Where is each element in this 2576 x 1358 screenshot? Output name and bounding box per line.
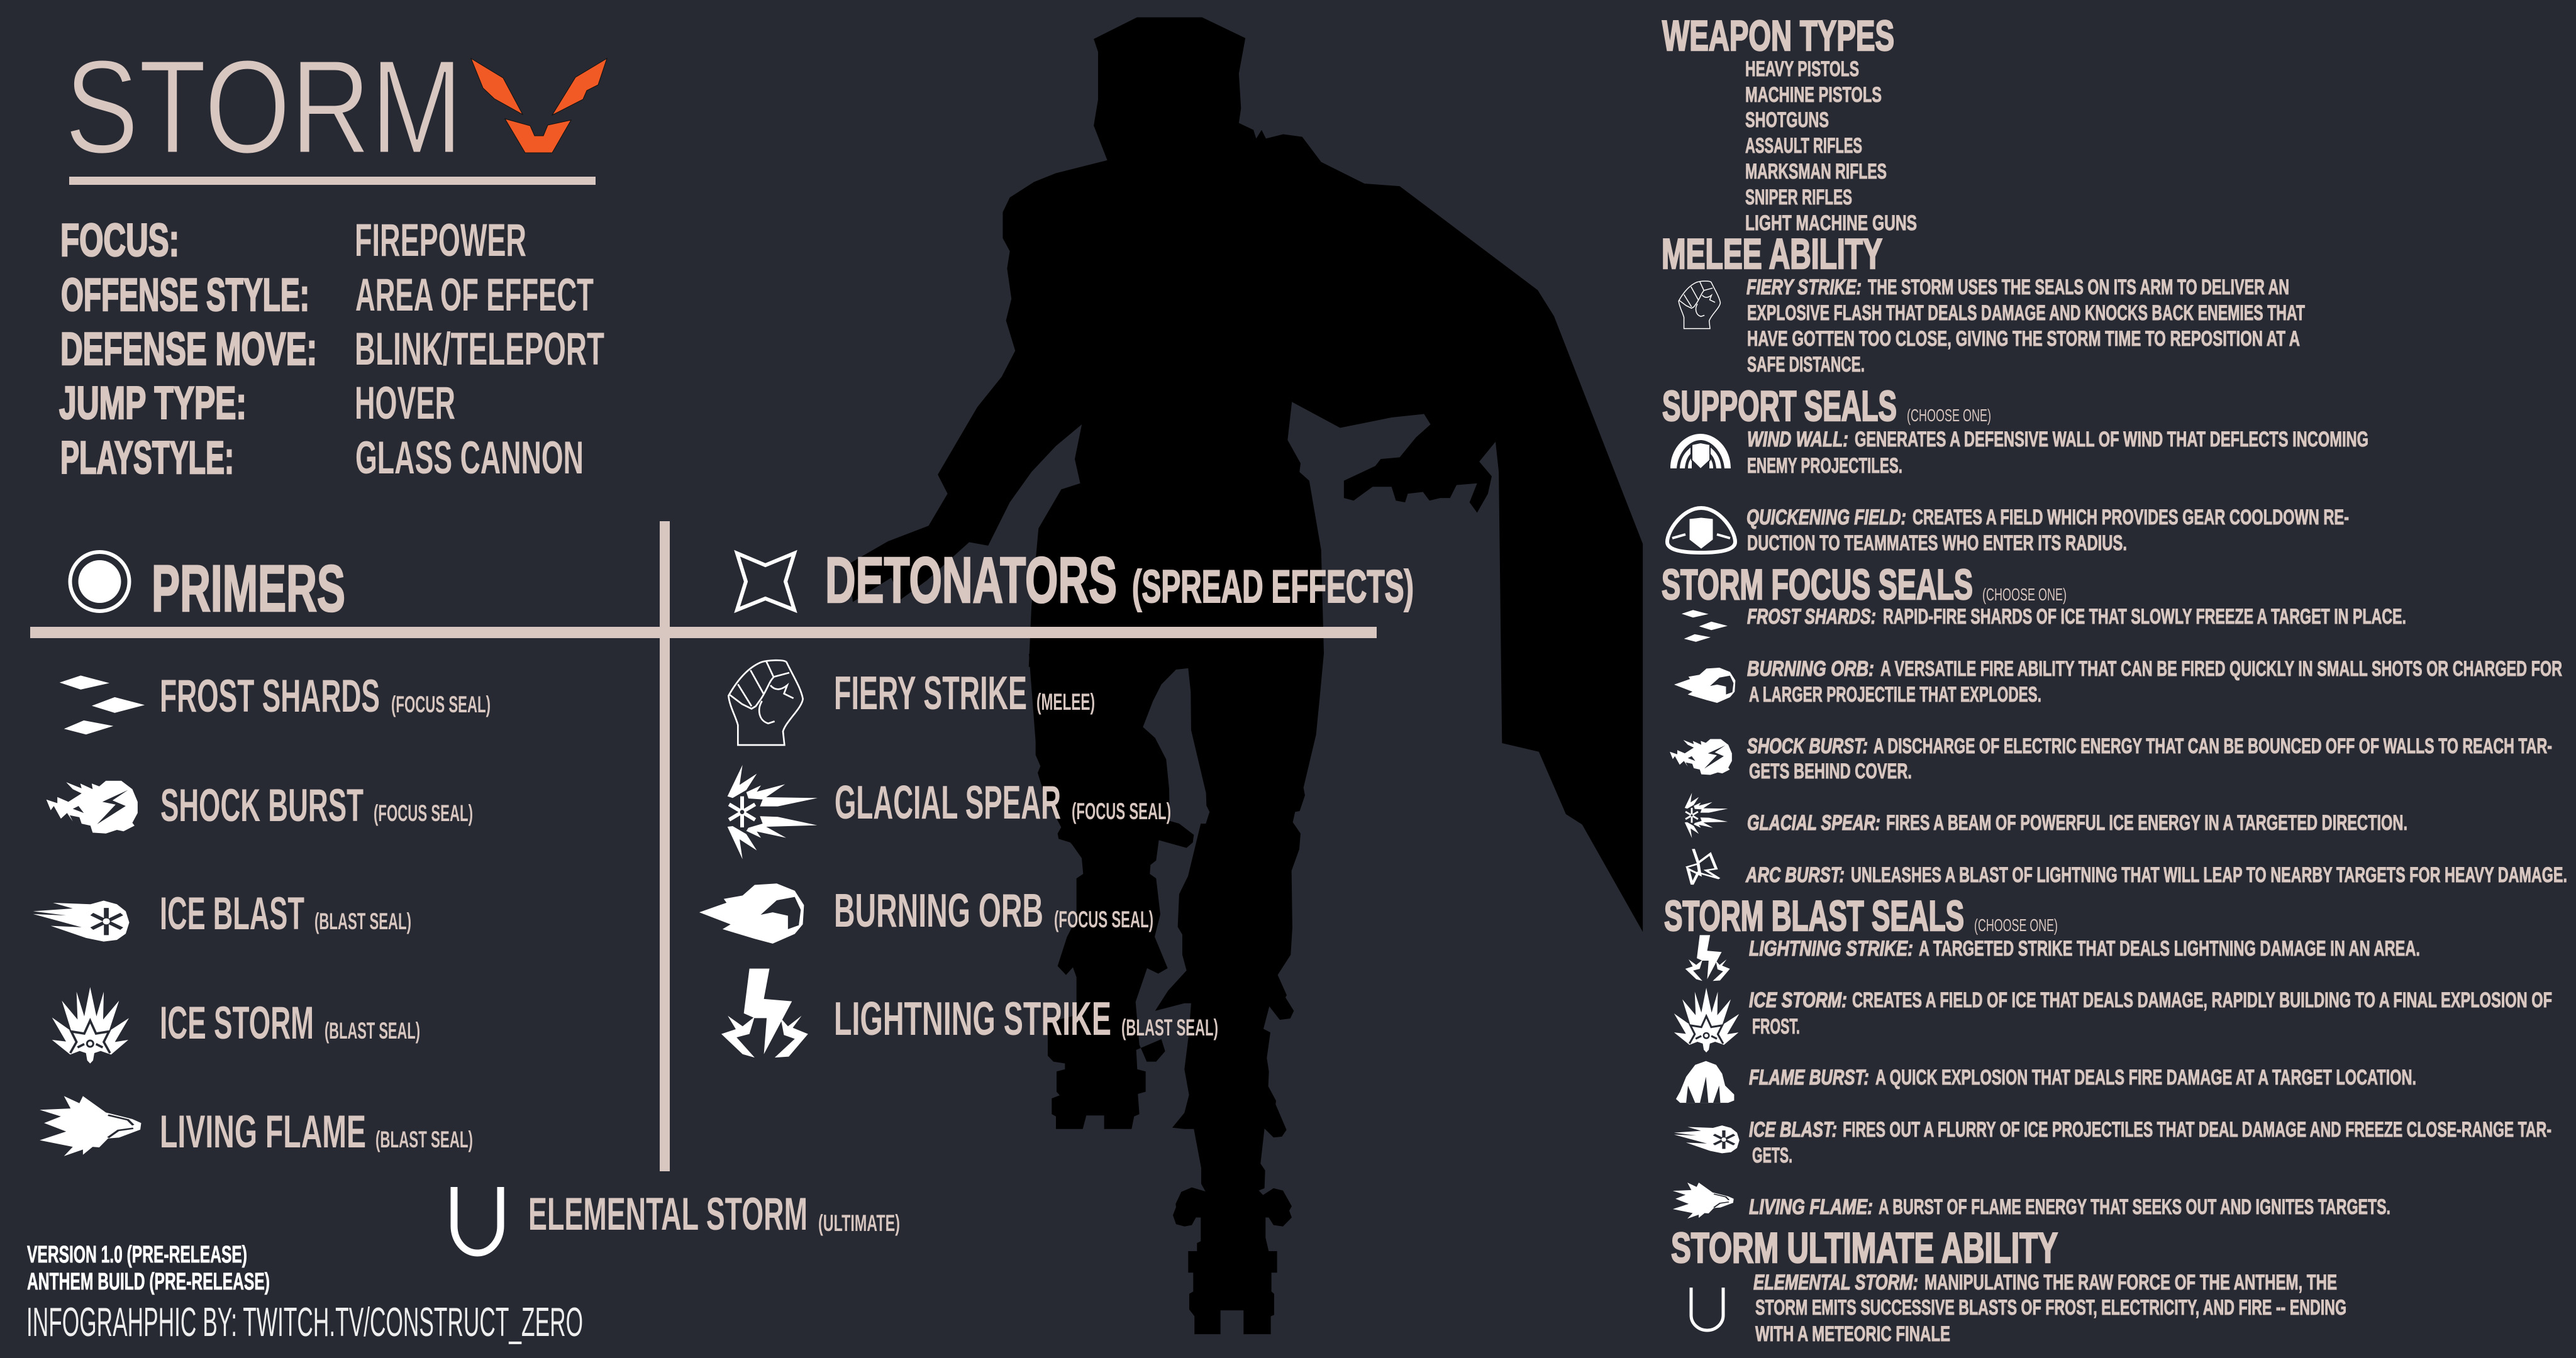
icon: fiery strike	[728, 660, 803, 745]
panel: class stats	[59, 215, 604, 483]
primer: living flame: (BLAST SEAL)	[375, 1127, 473, 1152]
panel: storm ultimate ability	[1671, 1224, 2346, 1346]
icon: shock burst small	[1670, 739, 1732, 775]
stat: jump type	[59, 378, 455, 429]
description: wind wall	[1747, 428, 2368, 478]
list: weapons: MARKSMAN RIFLES	[1745, 160, 1887, 184]
list: weapons: ASSAULT RIFLES	[1745, 134, 1862, 158]
description: ice blast: ICE BLAST:	[1749, 1118, 1837, 1142]
primer: ice storm: (BLAST SEAL)	[325, 1018, 420, 1044]
description: lightning strike: LIGHTNING STRIKE:	[1749, 937, 1913, 961]
description: fiery strike: FIERY STRIKE:	[1746, 275, 1862, 299]
stat: playstyle	[60, 433, 584, 483]
title block	[65, 32, 607, 185]
panel: detonators	[699, 544, 1414, 1057]
heading: detonators: DETONATORS	[825, 544, 1117, 616]
list: weapons: HEAVY PISTOLS	[1745, 57, 1859, 81]
icon: ice storm	[52, 987, 129, 1064]
stat: offense style: AREA OF EFFECT	[355, 270, 594, 321]
heading: storm ultimate ability: STORM ULTIMATE ABILITY	[1671, 1224, 2058, 1272]
icon: ice storm small	[1674, 988, 1739, 1052]
description: shock burst: SHOCK BURST:	[1747, 734, 1868, 758]
stat: defense move: BLINK/TELEPORT	[355, 324, 604, 375]
primer: shock burst: SHOCK BURST	[160, 780, 364, 831]
description: glacial spear: GLACIAL SPEAR:	[1747, 811, 1880, 835]
icon: lightning strike small	[1685, 935, 1730, 981]
description: elemental storm: WITH A METEORIC FINALE	[1755, 1322, 1950, 1346]
stat: playstyle: GLASS CANNON	[355, 433, 584, 483]
description: ice blast: GETS.	[1752, 1144, 1792, 1168]
description: quickening field: CREATES A FIELD WHICH PROVIDES GEAR COOLDOWN RE-	[1913, 505, 2349, 529]
author credit: INFOGRAHPHIC BY: TWITCH.TV/CONSTRUCT_ZERO	[26, 1299, 583, 1345]
description: burning orb: A LARGER PROJECTILE THAT EXPLODES.	[1749, 683, 2041, 707]
stat: defense move: DEFENSE MOVE:	[60, 324, 317, 375]
icon: burning orb	[699, 883, 804, 944]
heading: storm focus seals: STORM FOCUS SEALS	[1662, 561, 1973, 609]
heading: support seals: SUPPORT SEALS	[1662, 382, 1897, 430]
panel: melee ability	[1662, 230, 2305, 377]
stat: jump type: JUMP TYPE:	[59, 378, 247, 429]
description: quickening field: DUCTION TO TEAMMATES WHO ENTER ITS RADIUS.	[1747, 531, 2127, 555]
description: elemental storm: ELEMENTAL STORM:	[1753, 1271, 1918, 1295]
icon: detonator	[737, 553, 794, 610]
icon: shock burst	[47, 781, 138, 834]
panel: storm blast seals	[1664, 892, 2552, 1219]
heading: storm blast seals: STORM BLAST SEALS	[1664, 892, 1964, 940]
silhouette of storm javelin	[849, 18, 1643, 1334]
title underline	[69, 177, 596, 185]
description: elemental storm	[1753, 1271, 2346, 1346]
description: quickening field	[1746, 505, 2349, 555]
icon: glacial spear	[728, 765, 818, 859]
icon: burning orb small	[1674, 668, 1735, 703]
title: STORM: STORM	[65, 32, 463, 181]
description: frost shards: FROST SHARDS:	[1747, 605, 1876, 629]
list: weapons: SNIPER RIFLES	[1745, 185, 1852, 209]
primer: living flame: LIVING FLAME	[160, 1107, 366, 1157]
heading: melee ability: MELEE ABILITY	[1662, 230, 1882, 278]
primer: ice blast: (BLAST SEAL)	[314, 908, 411, 934]
icon: frost shards small	[1682, 610, 1728, 642]
table divider lines	[30, 521, 1377, 1171]
stat: offense style: OFFENSE STYLE:	[61, 270, 309, 321]
description: fiery strike	[1746, 275, 2305, 377]
icon: ultimate small	[1691, 1288, 1723, 1330]
description: lightning strike	[1749, 937, 2420, 961]
detonator: glacial spear: GLACIAL SPEAR	[835, 776, 1061, 829]
panel: weapon types	[1662, 12, 1917, 235]
primer: ice blast: ICE BLAST	[160, 888, 304, 939]
description: living flame	[1749, 1195, 2390, 1219]
detonator: glacial spear: (FOCUS SEAL)	[1072, 798, 1171, 824]
description: ice storm	[1749, 988, 2552, 1039]
icon: glacial spear small	[1685, 793, 1728, 838]
ultimate: elemental storm: (ULTIMATE)	[818, 1210, 900, 1236]
icon: quickening field	[1667, 508, 1735, 553]
list: weapons: LIGHT MACHINE GUNS	[1745, 211, 1917, 235]
icon: primer	[70, 552, 130, 611]
description: living flame: LIVING FLAME:	[1749, 1195, 1873, 1219]
version text: VERSION 1.0 (PRE-RELEASE)	[27, 1242, 247, 1268]
description: flame burst: FLAME BURST:	[1749, 1066, 1869, 1090]
description: wind wall: WIND WALL:	[1747, 428, 1848, 451]
heading: storm blast seals: (CHOOSE ONE)	[1974, 915, 2058, 935]
heading: storm focus seals: (CHOOSE ONE)	[1982, 585, 2067, 604]
icon: ultimate	[454, 1187, 501, 1253]
icon: flame burst	[1676, 1061, 1734, 1103]
icon: lightning strike	[721, 969, 808, 1057]
detonator: lightning strike: LIGHTNING STRIKE	[834, 992, 1111, 1045]
build text: ANTHEM BUILD (PRE-RELEASE)	[27, 1269, 270, 1295]
icon: fist	[1679, 281, 1720, 329]
stat: defense move	[60, 324, 604, 375]
description: ice blast	[1749, 1118, 2551, 1168]
primer: ice storm: ICE STORM	[160, 998, 314, 1049]
description: fiery strike: THE STORM USES THE SEALS ON ITS ARM TO DELIVER AN	[1868, 275, 2289, 299]
primer: frost shards: (FOCUS SEAL)	[391, 692, 491, 717]
description: glacial spear	[1747, 811, 2407, 835]
primer: frost shards: FROST SHARDS	[160, 671, 380, 722]
icon: storm logo	[471, 58, 607, 153]
list: weapons: SHOTGUNS	[1745, 108, 1829, 132]
icon: ice blast	[33, 900, 130, 942]
heading: primers: PRIMERS	[152, 552, 345, 626]
description: frost shards	[1747, 605, 2406, 629]
detonator: fiery strike: (MELEE)	[1036, 689, 1095, 715]
heading: weapon types: WEAPON TYPES	[1662, 12, 1894, 60]
icon: living flame small	[1673, 1183, 1734, 1218]
stat: focus	[60, 215, 526, 266]
description: shock burst: GETS BEHIND COVER.	[1749, 759, 1912, 783]
description: fiery strike: SAFE DISTANCE.	[1747, 353, 1865, 377]
panel: support seals	[1662, 382, 2368, 555]
subheading: spread effects: (SPREAD EFFECTS)	[1132, 561, 1414, 612]
detonator: burning orb: BURNING ORB	[834, 884, 1043, 937]
description: elemental storm: MANIPULATING THE RAW FORCE OF THE ANTHEM, THE	[1924, 1271, 2337, 1295]
icon: living flame	[40, 1096, 141, 1156]
icon: ice blast small	[1674, 1125, 1740, 1153]
credits	[26, 1242, 583, 1345]
icon: wind wall	[1670, 434, 1731, 469]
ultimate row	[454, 1187, 900, 1253]
description: burning orb: BURNING ORB:	[1747, 657, 1874, 681]
description: ice storm: ICE STORM:	[1749, 988, 1847, 1012]
ultimate: elemental storm: ELEMENTAL STORM	[528, 1189, 808, 1240]
primer: shock burst: (FOCUS SEAL)	[374, 800, 473, 826]
detonator: fiery strike: FIERY STRIKE	[834, 666, 1027, 719]
stat: focus: FOCUS:	[60, 215, 179, 266]
list: weapons	[1745, 57, 1917, 235]
description: shock burst	[1747, 734, 2552, 783]
panel: storm focus seals	[1662, 561, 2567, 887]
icon: arc burst	[1686, 849, 1719, 885]
stat: jump type: HOVER	[355, 378, 455, 429]
description: fiery strike: HAVE GOTTEN TOO CLOSE, GIVING THE STORM TIME TO REPOSITION AT A	[1747, 327, 2300, 351]
heading: support seals: (CHOOSE ONE)	[1907, 406, 1991, 425]
description: flame burst	[1749, 1066, 2416, 1090]
icon: frost shards	[60, 675, 145, 734]
stat: focus: FIREPOWER	[355, 215, 526, 266]
panel: primers	[33, 552, 491, 1157]
detonator: lightning strike: (BLAST SEAL)	[1121, 1015, 1218, 1041]
description: ice storm: FROST.	[1752, 1015, 1800, 1039]
description: burning orb	[1747, 657, 2562, 707]
detonator: burning orb: (FOCUS SEAL)	[1054, 907, 1153, 932]
stat: playstyle: PLAYSTYLE:	[60, 433, 234, 483]
description: wind wall: ENEMY PROJECTILES.	[1747, 454, 1902, 478]
description: fiery strike: EXPLOSIVE FLASH THAT DEALS DAMAGE AND KNOCKS BACK ENEMIES THAT	[1747, 301, 2305, 325]
description: wind wall: GENERATES A DEFENSIVE WALL OF WIND THAT DEFLECTS INCOMING	[1855, 428, 2368, 451]
description: quickening field: QUICKENING FIELD:	[1746, 505, 1906, 529]
list: weapons: MACHINE PISTOLS	[1745, 83, 1882, 107]
description: arc burst: ARC BURST:	[1745, 863, 1845, 887]
